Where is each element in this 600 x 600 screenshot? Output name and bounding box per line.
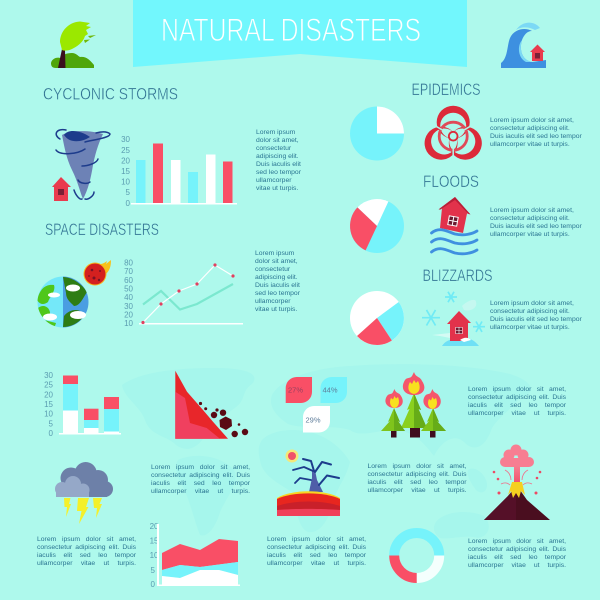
text block: landslide [151, 464, 250, 495]
text block: drought: iaculis elit sed leo tempor [368, 479, 466, 486]
area chart [150, 522, 240, 589]
leaf: 29%: 29% [305, 416, 321, 424]
text block: storm: consectetur adipiscing elit. Duis [37, 544, 136, 551]
pie chart: blizzards [350, 291, 404, 345]
text block: volcano [468, 538, 566, 569]
line chart: space disasters: 50 [124, 284, 134, 294]
text block: cyclonic storms: Duis iaculis elit [256, 160, 301, 168]
icon: volcano [484, 444, 550, 520]
text block: forest fire: Lorem ipsum dolor sit amet, [468, 386, 566, 393]
text block: epidemics: consectetur adipiscing elit. [490, 124, 570, 132]
text block: blizzards: consectetur adipiscing elit. [490, 308, 570, 315]
text block: floods [490, 207, 582, 238]
text block: space disasters: Duis iaculis elit [255, 282, 300, 289]
text block: blizzards: Lorem ipsum dolor sit amet, [490, 300, 574, 307]
bar chart: cyclonic storms: 25 [121, 146, 131, 155]
text block: landslide: iaculis elit sed leo tempor [151, 480, 250, 487]
area chart: 15 [150, 536, 159, 546]
leaf: 27%: 27% [288, 386, 303, 394]
text block: space disasters: ullamcorper [255, 298, 291, 305]
text block: cyclonic storms: consectetur [256, 144, 291, 152]
text block: cyclonic storms: adipiscing elit. [256, 152, 299, 160]
text block: area chart: Lorem ipsum dolor sit amet, [267, 536, 366, 543]
line chart: space disasters: 40 [124, 293, 134, 302]
text block: floods: Duis iaculis elit sed leo tempor [490, 223, 582, 230]
stacked bar chart: 0 [49, 429, 54, 438]
text block: space disasters: adipiscing elit. [255, 274, 298, 281]
bar chart: cyclonic storms: 0 [126, 199, 131, 208]
text block: forest fire: iaculis elit sed leo tempor [468, 402, 566, 409]
icon: landslide [175, 371, 248, 439]
icon: earth and meteor [37, 260, 111, 329]
line chart: space disasters: 30 [124, 302, 134, 311]
stacked bar chart: 15 [44, 400, 54, 409]
icon: drought tree and sun [277, 450, 340, 516]
icon: tsunami wave and house [501, 23, 546, 68]
text block: cyclonic storms: sed leo tempor [256, 168, 301, 176]
stacked bar chart: 10 [44, 410, 54, 419]
text block: volcano: consectetur adipiscing elit. Duis [468, 546, 566, 553]
text block: floods: ullamcorper vitae ut turpis. [490, 231, 570, 238]
text block: cyclonic storms: Lorem ipsum [256, 128, 295, 136]
pie chart: epidemics [350, 106, 404, 160]
text block: space disasters: sed leo tempor [255, 290, 300, 297]
bar chart: cyclonic storms: 30 [121, 135, 131, 144]
stacked bar chart: 30 [44, 371, 54, 380]
icon: biohazard [419, 106, 488, 166]
text block: epidemics: ullamcorper vitae ut turpis. [490, 140, 570, 148]
text block: area chart: consectetur adipiscing elit. Duis [267, 544, 366, 551]
area chart: 5 [151, 566, 156, 575]
text block: drought: consectetur adipiscing elit. Duis [368, 471, 466, 478]
text block: floods: Lorem ipsum dolor sit amet, [490, 207, 574, 214]
text block: drought [368, 463, 466, 494]
stacked bar chart: 5 [49, 420, 54, 428]
text block: space disasters: Lorem ipsum [255, 250, 294, 257]
background world map [122, 364, 531, 538]
line chart: space disasters: 70 [124, 267, 134, 276]
text block: storm: ullamcorper vitae ut turpis. [37, 560, 136, 567]
icon: forest fire [381, 372, 446, 438]
icon: house in blizzard [422, 292, 485, 346]
icon: tornado and house [52, 130, 110, 201]
text block: forest fire: consectetur adipiscing elit. Duis [468, 394, 566, 401]
line chart: space disasters: 20 [124, 310, 134, 320]
stacked bar chart: 25 [44, 380, 54, 390]
icon: flooded house [432, 197, 477, 254]
bar chart: cyclonic storms: 15 [121, 167, 131, 176]
text block: epidemics [490, 116, 582, 148]
text block: storm: iaculis elit sed leo tempor [37, 552, 136, 559]
icon: storm cloud with lightning [55, 462, 113, 524]
percentage leaves [286, 377, 347, 432]
heading: epidemics: EPIDEMICS [412, 80, 480, 99]
text block: blizzards: Duis iaculis elit sed leo tempor [490, 316, 582, 323]
text block: volcano: Lorem ipsum dolor sit amet, [468, 538, 566, 545]
text block: cyclonic storms: vitae ut turpis. [256, 184, 298, 192]
text block: space disasters: vitae ut turpis. [255, 306, 297, 313]
leaf: 44%: 44% [322, 386, 338, 394]
text block: drought: ullamcorper vitae ut turpis. [368, 487, 466, 494]
text block: landslide: consectetur adipiscing elit. Duis [151, 472, 250, 479]
text block: floods: consectetur adipiscing elit. [490, 215, 570, 222]
line chart: space disasters [124, 258, 243, 328]
heading: blizzards: BLIZZARDS [422, 266, 492, 285]
text block: blizzards: ullamcorper vitae ut turpis. [490, 324, 570, 331]
text block: space disasters [255, 250, 300, 313]
text block: landslide: Lorem ipsum dolor sit amet, [151, 464, 250, 471]
title: NATURAL DISASTERS [161, 12, 421, 48]
pie chart: floods [350, 199, 404, 253]
text block: drought: Lorem ipsum dolor sit amet, [368, 463, 466, 470]
heading: cyclonic storms: CYCLONIC STORMS [43, 84, 178, 104]
text block: volcano: ullamcorper vitae ut turpis. [468, 562, 566, 569]
line chart: space disasters: 60 [124, 276, 134, 285]
donut chart [394, 533, 439, 578]
text block: space disasters: consectetur [255, 266, 290, 273]
bar chart: cyclonic storms [121, 135, 237, 208]
text block: storm: Lorem ipsum dolor sit amet, [37, 536, 136, 543]
text block: forest fire: ullamcorper vitae ut turpis. [468, 410, 566, 417]
bar chart: cyclonic storms: 5 [126, 188, 131, 197]
area chart: 10 [150, 551, 159, 560]
text block: volcano: iaculis elit sed leo tempor [468, 554, 566, 561]
text block: cyclonic storms [256, 128, 301, 192]
line chart: space disasters: 10 [124, 319, 134, 328]
stacked bar chart: 20 [44, 390, 54, 400]
text block: area chart: iaculis elit sed leo tempor [267, 552, 366, 559]
area chart: 20 [150, 522, 159, 531]
bar chart: cyclonic storms: 20 [121, 156, 131, 166]
text block: area chart [267, 536, 366, 567]
heading: space disasters: SPACE DISASTERS [45, 220, 159, 239]
text block: epidemics: Duis iaculis elit sed leo tempor [490, 132, 582, 140]
heading: floods: FLOODS [423, 172, 479, 191]
title banner [133, 0, 467, 67]
line chart: space disasters: 80 [124, 258, 134, 268]
text block: blizzards [490, 300, 582, 331]
text block: epidemics: Lorem ipsum dolor sit amet, [490, 116, 574, 124]
icon: wind-blown tree [51, 22, 96, 68]
area chart: 0 [151, 580, 156, 589]
text block: landslide: ullamcorper vitae ut turpis. [151, 488, 250, 495]
bar chart: cyclonic storms: 10 [121, 178, 131, 186]
text block: space disasters: dolor sit amet, [255, 258, 298, 265]
text block: cyclonic storms: dolor sit amet, [256, 136, 299, 144]
text block: area chart: ullamcorper vitae ut turpis. [267, 560, 366, 567]
stacked bar chart [44, 371, 121, 438]
text block: forest fire [468, 386, 566, 417]
text block: storm [37, 536, 136, 567]
text block: cyclonic storms: ullamcorper [256, 176, 292, 184]
